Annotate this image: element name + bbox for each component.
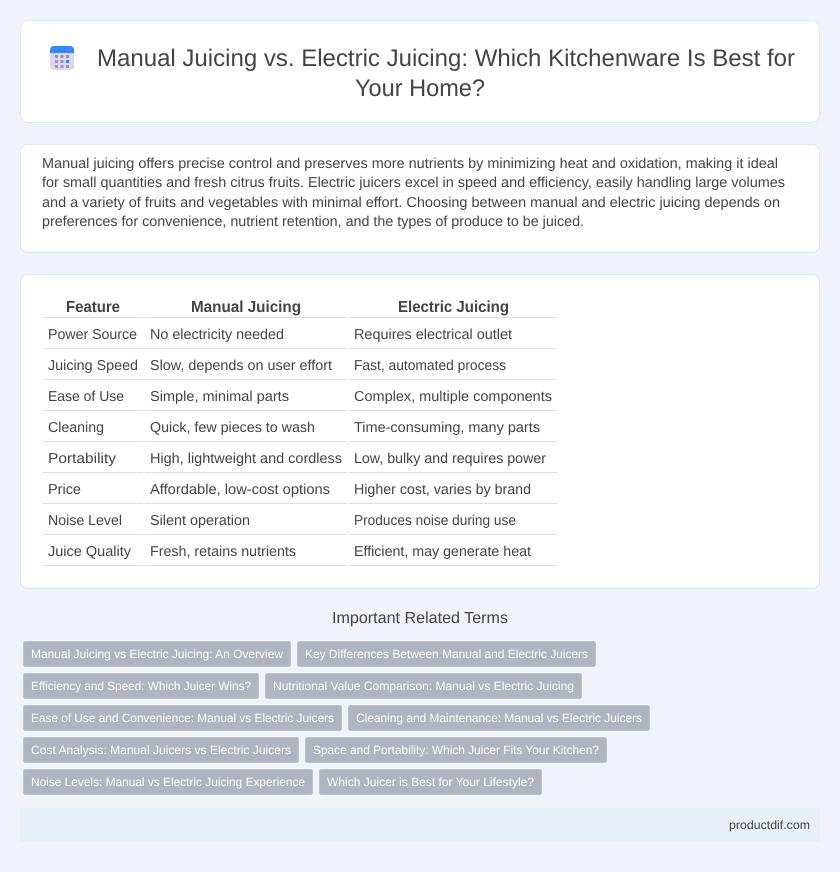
chip: Ease of Use and Convenience: Manual vs Electric Juicers	[31, 711, 334, 725]
row: power source: Power Source	[48, 327, 137, 343]
table header: Feature	[66, 299, 120, 316]
row: price	[48, 482, 531, 498]
row: ease of use: Ease of Use	[48, 389, 124, 405]
row: cleaning: Time-consuming, many parts	[354, 420, 540, 436]
chip	[348, 706, 650, 730]
footer: productdif.com	[729, 818, 810, 832]
heading: important related terms: Important Related Terms	[332, 610, 508, 627]
row: noise level: Noise Level	[48, 513, 122, 529]
chip: Which Juicer is Best for Your Lifestyle?	[327, 775, 534, 789]
chip	[320, 770, 542, 794]
row: price: Higher cost, varies by brand	[354, 482, 531, 498]
row: juicing speed	[48, 358, 506, 374]
row: cleaning: Cleaning	[48, 420, 104, 436]
chip	[24, 738, 298, 762]
row: portability: Low, bulky and requires power	[354, 451, 546, 467]
text block: introduction paragraph: for small quantities and fresh citrus fruits. Electric juicers excel in speed and efficiency, easily handling large volumes	[42, 175, 785, 191]
table header	[66, 299, 509, 316]
chip	[298, 642, 596, 666]
row: power source	[48, 327, 512, 343]
row: portability: Portability	[48, 451, 117, 467]
row: juice quality: Juice Quality	[48, 544, 132, 560]
panel: introduction	[20, 144, 820, 252]
row: power source: No electricity needed	[150, 327, 284, 343]
chip	[24, 674, 258, 698]
chip	[24, 706, 342, 730]
text block: introduction paragraph: preferences for convenience, nutrient retention, and the types of produce to be juiced.	[42, 214, 584, 230]
chip: Space and Portability: Which Juicer Fits Your Kitchen?	[313, 743, 599, 757]
footer	[20, 808, 820, 842]
chip	[24, 642, 290, 666]
row: ease of use: Simple, minimal parts	[150, 389, 289, 405]
row: cleaning	[48, 420, 540, 436]
chip	[266, 674, 582, 698]
chip: Key Differences Between Manual and Electric Juicers	[305, 647, 588, 661]
panel: related term chips	[24, 642, 650, 794]
table header: Manual Juicing	[191, 299, 301, 316]
row: cleaning: Quick, few pieces to wash	[150, 420, 315, 436]
row: noise level	[48, 513, 516, 529]
row: juice quality	[48, 544, 531, 560]
icon: calendar	[50, 46, 74, 70]
chip: Noise Levels: Manual vs Electric Juicing Experience	[31, 775, 305, 789]
row: juicing speed: Slow, depends on user effort	[150, 358, 332, 374]
chip	[306, 738, 606, 762]
chip	[24, 770, 312, 794]
row: juicing speed: Juicing Speed	[48, 358, 138, 374]
table header: Electric Juicing	[398, 299, 509, 316]
row: juice quality: Efficient, may generate heat	[354, 544, 531, 560]
row: ease of use: Complex, multiple components	[354, 389, 552, 405]
row: power source: Requires electrical outlet	[354, 327, 512, 343]
row: noise level: Produces noise during use	[354, 513, 516, 529]
title: Your Home?	[355, 75, 485, 102]
row: portability	[48, 451, 546, 467]
row: price: Affordable, low-cost options	[150, 482, 330, 498]
chip: Nutritional Value Comparison: Manual vs Electric Juicing	[273, 679, 574, 693]
chip: Manual Juicing vs Electric Juicing: An Overview	[31, 647, 283, 661]
title	[97, 45, 795, 102]
row: ease of use	[48, 389, 552, 405]
text block: introduction paragraph: Manual juicing offers precise control and preserves more nutrients by minimizing heat and oxidation, making it ideal	[42, 156, 778, 172]
title: Manual Juicing vs. Electric Juicing: Which Kitchenware Is Best for	[97, 45, 795, 72]
text block: introduction paragraph	[42, 156, 785, 230]
chip: Efficiency and Speed: Which Juicer Wins?	[31, 679, 251, 693]
panel: title card	[20, 20, 820, 122]
row: juicing speed: Fast, automated process	[354, 358, 506, 374]
panel: comparison table	[20, 274, 820, 588]
text block: introduction paragraph: and a variety of fruits and vegetables with minimal effort. Choosing between manual and electric juicing depends on	[42, 195, 780, 211]
row: juice quality: Fresh, retains nutrients	[150, 544, 296, 560]
chip: Cost Analysis: Manual Juicers vs Electric Juicers	[31, 743, 291, 757]
row: portability: High, lightweight and cordless	[150, 451, 342, 467]
chip: Cleaning and Maintenance: Manual vs Electric Juicers	[356, 711, 642, 725]
row: noise level: Silent operation	[150, 513, 250, 529]
row: price: Price	[48, 482, 81, 498]
